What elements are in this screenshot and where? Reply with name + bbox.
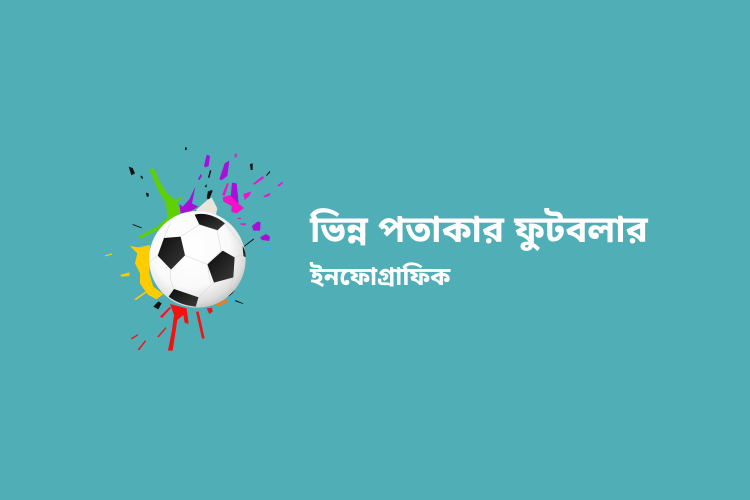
ball panel bottom xyxy=(169,289,199,307)
purple paint splash xyxy=(179,155,270,241)
yellow paint splash xyxy=(105,245,163,300)
ball panel top xyxy=(195,214,225,230)
red paint splash xyxy=(131,304,213,351)
black paint specks xyxy=(129,147,270,309)
ball panel left xyxy=(158,237,185,270)
title: ভিন্ন পতাকার ফুটবলার xyxy=(310,209,648,250)
magenta paint splash xyxy=(222,153,283,225)
cream paint splash xyxy=(196,197,217,215)
football xyxy=(149,211,246,308)
green paint splash xyxy=(138,168,183,239)
orange paint splash xyxy=(215,299,228,307)
cyan paint specks xyxy=(230,246,272,302)
ball panel right xyxy=(207,251,235,283)
subtitle: ইনফোগ্রাফিক xyxy=(310,263,450,291)
